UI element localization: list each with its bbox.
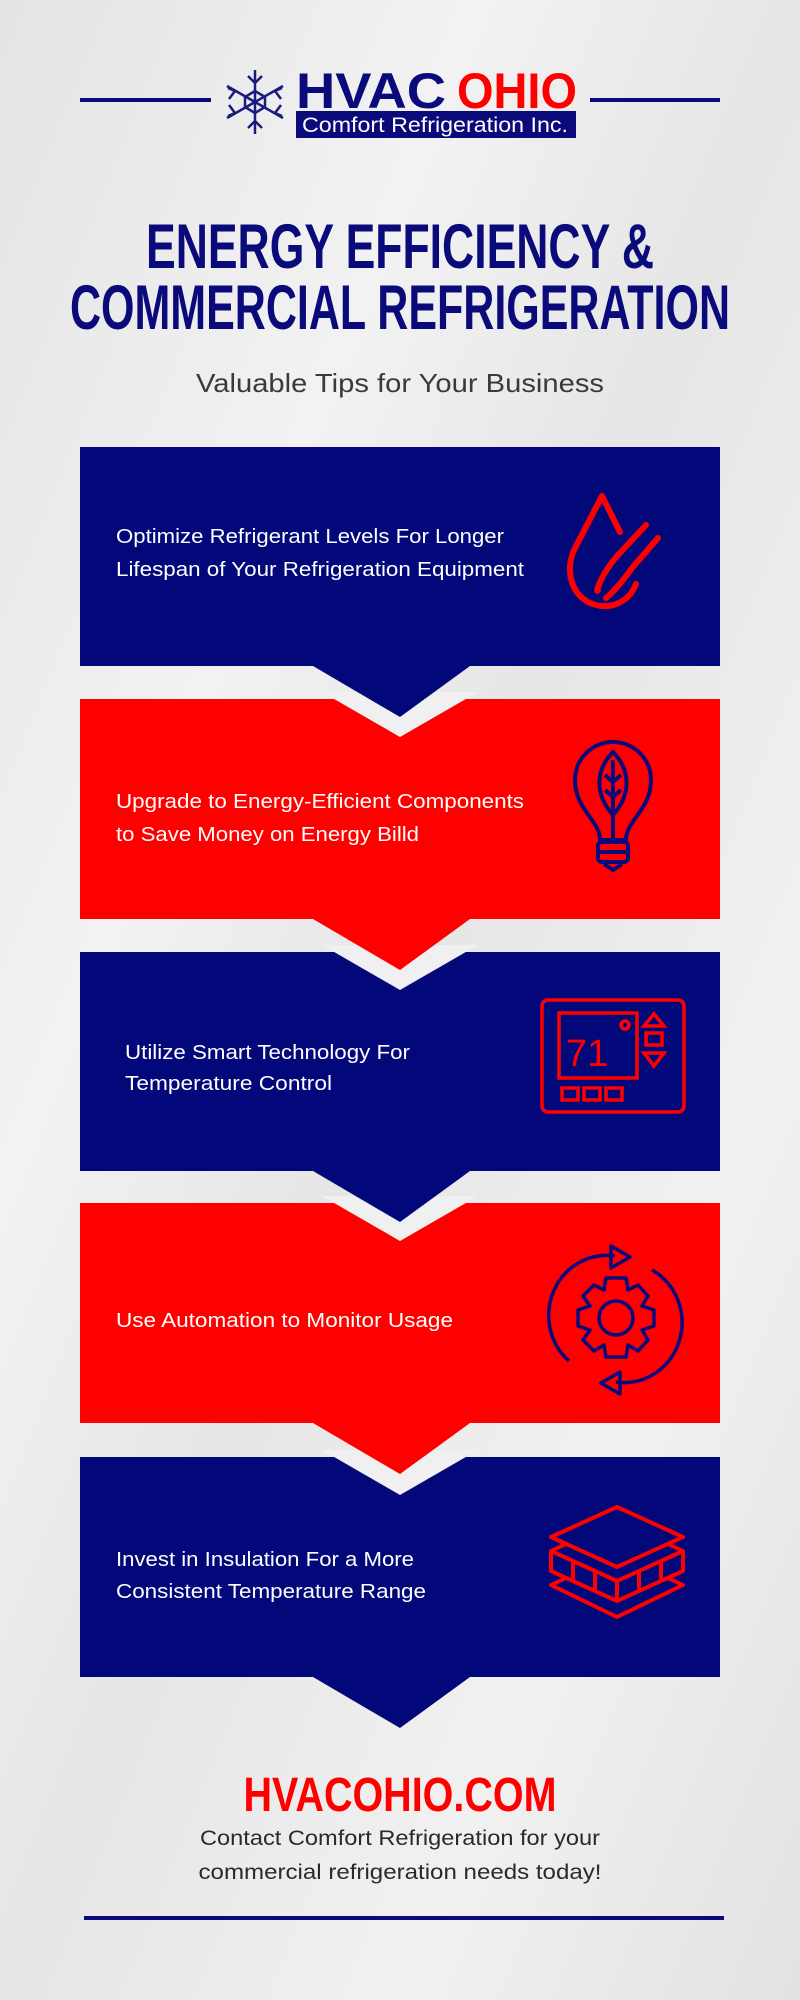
icon: thermostat <box>542 1000 684 1112</box>
contact text <box>198 1827 602 1884</box>
arrow: 3 to 4 <box>313 1171 470 1222</box>
icon: refrigerant drop <box>570 496 658 606</box>
title <box>70 212 730 343</box>
icon: insulation layers <box>551 1507 683 1617</box>
website: HVACOHIO.COM <box>244 1769 556 1822</box>
panel: tip 4: Use Automation to Monitor Usage <box>116 1310 453 1332</box>
arrow: 1 to 2 <box>313 666 470 717</box>
panel: tip 2: to Save Money on Energy Billd <box>116 824 419 846</box>
panel: tip 4 <box>80 1196 720 1423</box>
contact text: Contact Comfort Refrigeration for your <box>200 1827 600 1850</box>
logo: Comfort Refrigeration Inc. <box>302 114 568 137</box>
arrow: 4 to 5 <box>313 1423 470 1474</box>
panel: tip 1 <box>80 447 720 666</box>
panel: tip 1: Optimize Refrigerant Levels For Longer <box>116 526 504 548</box>
panel: tip 5 <box>80 1450 720 1677</box>
panel: tip 3 <box>80 945 720 1171</box>
panel: tip 3: Utilize Smart Technology For <box>125 1042 410 1064</box>
panel: tip 5: Consistent Temperature Range <box>116 1581 426 1603</box>
panel: tip 3: Temperature Control <box>125 1073 332 1095</box>
panel: tip 2: Upgrade to Energy-Efficient Components <box>116 791 524 813</box>
icon: thermostat: 71 <box>566 1033 608 1075</box>
icon: gear with cycle arrows <box>549 1246 682 1394</box>
icon: lightbulb with leaf <box>575 742 651 870</box>
arrow: final <box>313 1677 470 1728</box>
contact text: commercial refrigeration needs today! <box>198 1861 602 1884</box>
logo <box>80 63 720 138</box>
panel: tip 5: Invest in Insulation For a More <box>116 1549 414 1571</box>
subtitle: Valuable Tips for Your Business <box>196 368 604 398</box>
arrow: 2 to 3 <box>313 919 470 970</box>
logo: OHIO <box>457 63 577 119</box>
logo: HVAC <box>296 63 446 119</box>
icon: snowflake <box>227 70 283 134</box>
panel: tip 1: Lifespan of Your Refrigeration Equipment <box>116 559 524 581</box>
panel: tip 2 <box>80 692 720 919</box>
